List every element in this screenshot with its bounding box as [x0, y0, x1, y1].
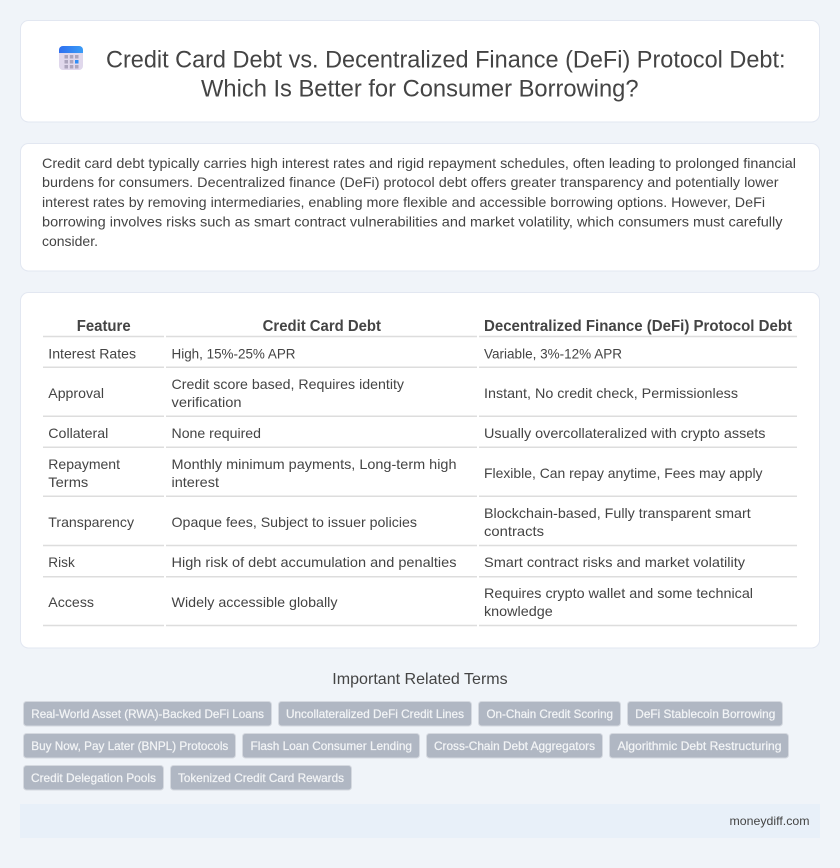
chip: Buy Now, Pay Later (BNPL) Protocols [31, 739, 228, 753]
heading: important related terms: Important Related Terms [332, 671, 508, 688]
row: repayment terms: Flexible, Can repay anytime, Fees may apply [484, 465, 762, 481]
panel: comparison table [20, 292, 820, 648]
chip: Cross-Chain Debt Aggregators [434, 739, 595, 753]
chip [426, 734, 602, 758]
chip [24, 766, 164, 790]
title [106, 46, 786, 102]
panel: title header [20, 20, 820, 122]
table header: Decentralized Finance (DeFi) Protocol Debt [484, 318, 793, 335]
chip: Flash Loan Consumer Lending [250, 739, 412, 753]
row: risk: Risk [48, 554, 76, 570]
chip: Tokenized Credit Card Rewards [178, 771, 344, 785]
row: risk [48, 554, 745, 570]
icon: calendar [59, 46, 83, 70]
intro paragraph [42, 155, 796, 249]
row: approval: verification [172, 394, 242, 410]
chip: DeFi Stablecoin Borrowing [635, 707, 775, 721]
row: access: Requires crypto wallet and some technical [484, 585, 753, 601]
chip [24, 734, 236, 758]
row: repayment terms: Monthly minimum payments, Long-term high [172, 456, 456, 472]
row: repayment terms: Terms [48, 474, 88, 490]
table grid lines [43, 336, 797, 626]
row: risk: Smart contract risks and market volatility [484, 554, 745, 570]
table header [77, 318, 793, 335]
row: approval: Approval [48, 385, 104, 401]
row: transparency: Blockchain-based, Fully transparent smart [484, 505, 751, 521]
row: repayment terms: interest [172, 474, 219, 490]
table header: Feature [77, 318, 131, 335]
title: Which Is Better for Consumer Borrowing? [201, 76, 638, 102]
intro paragraph: consider. [42, 233, 98, 249]
chip: Real-World Asset (RWA)-Backed DeFi Loans [31, 707, 264, 721]
chip: On-Chain Credit Scoring [486, 707, 613, 721]
row: collateral: None required [172, 425, 261, 441]
intro paragraph: borrowing involves risks such as smart contract vulnerabilities and market volatility, which consumers must carefully [42, 214, 782, 230]
row: access [48, 585, 753, 619]
chip [242, 734, 420, 758]
chip [170, 766, 352, 790]
row: transparency [48, 505, 751, 539]
chip [628, 702, 782, 726]
related term chips [24, 702, 788, 790]
intro paragraph: interest rates by removing intermediaries, enabling more flexible and accessible borrowing options. However, DeFi [42, 194, 765, 210]
chip [478, 702, 620, 726]
row: access: Access [48, 594, 94, 610]
row: approval: Credit score based, Requires identity [172, 376, 404, 392]
row: access: knowledge [484, 603, 553, 619]
row: approval: Instant, No credit check, Permissionless [484, 385, 738, 401]
row: interest rates: Interest Rates [48, 345, 136, 361]
row: access: Widely accessible globally [172, 594, 338, 610]
chip: Algorithmic Debt Restructuring [618, 739, 782, 753]
chip [24, 702, 272, 726]
row: risk: High risk of debt accumulation and penalties [172, 554, 456, 570]
title: Credit Card Debt vs. Decentralized Finance (DeFi) Protocol Debt: [106, 46, 786, 74]
row: collateral: Usually overcollateralized with crypto assets [484, 425, 766, 441]
row: transparency: contracts [484, 523, 544, 539]
chip [610, 734, 788, 758]
footer source: moneydiff.com [730, 814, 810, 828]
intro paragraph: burdens for consumers. Decentralized finance (DeFi) protocol debt offers greater transparency and potentially lower [42, 174, 779, 190]
row: collateral [48, 425, 766, 441]
panel: intro text [20, 144, 820, 271]
intro paragraph: Credit card debt typically carries high interest rates and rigid repayment schedules, often leading to prolonged financial [42, 155, 796, 171]
row: interest rates: High, 15%-25% APR [172, 345, 296, 361]
row: approval [48, 376, 738, 410]
row: repayment terms [48, 456, 763, 490]
row: transparency: Transparency [48, 514, 134, 530]
chip: Uncollateralized DeFi Credit Lines [286, 707, 464, 721]
chip: Credit Delegation Pools [31, 771, 156, 785]
row: repayment terms: Repayment [48, 456, 120, 472]
row: interest rates: Variable, 3%-12% APR [484, 345, 622, 361]
row: transparency: Opaque fees, Subject to issuer policies [172, 514, 417, 530]
row: interest rates [48, 345, 622, 361]
table header: Credit Card Debt [263, 318, 382, 335]
row: collateral: Collateral [48, 425, 108, 441]
chip [278, 702, 472, 726]
footer bar [20, 804, 820, 838]
